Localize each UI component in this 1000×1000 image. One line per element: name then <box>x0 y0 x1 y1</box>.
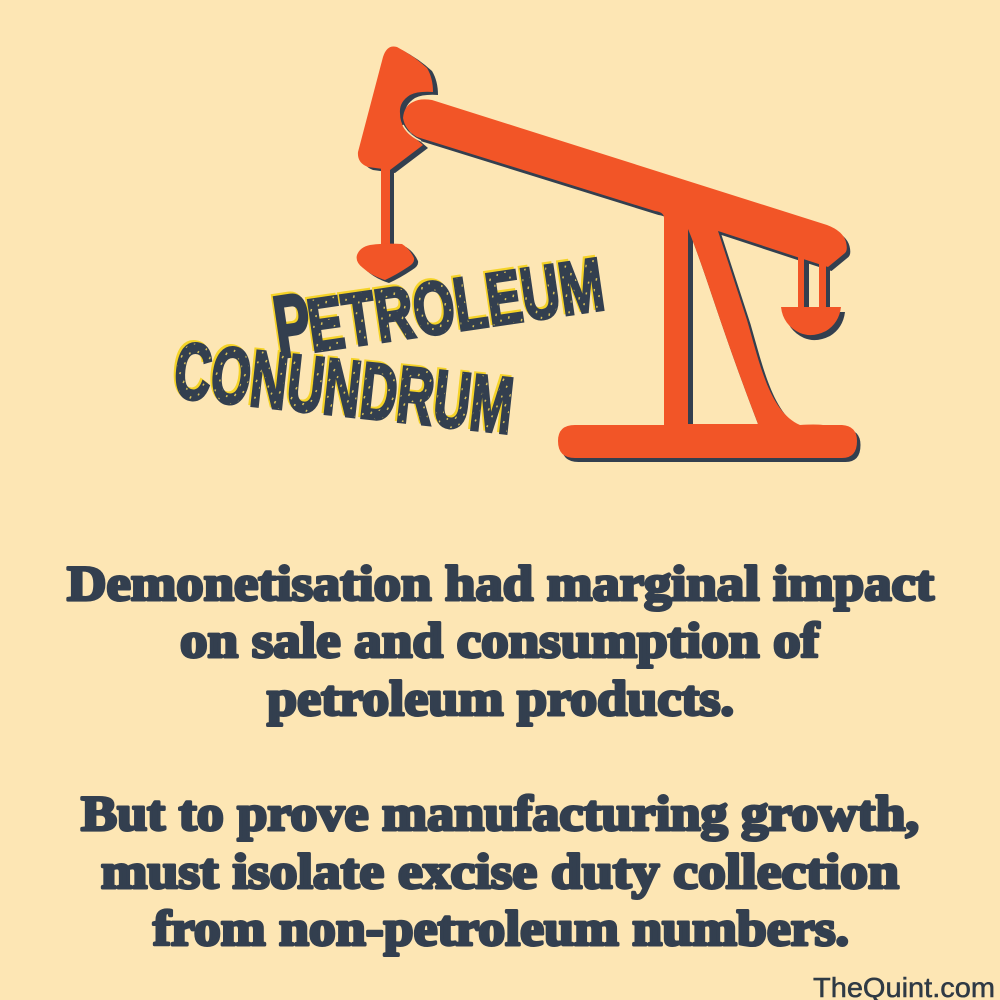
icon: oil pump jack <box>357 46 860 462</box>
heading dark letters <box>170 242 609 451</box>
heading yellow offset: P <box>265 272 315 375</box>
horse head <box>358 46 433 170</box>
text block: demonetisation impact: petroleum products. <box>267 670 734 726</box>
polished rod <box>381 160 390 250</box>
text block: demonetisation impact <box>67 555 934 726</box>
cut-out between post and strut <box>688 229 758 424</box>
text block: manufacturing growth: But to prove manufacturing growth, <box>81 785 919 841</box>
hanger bowl <box>781 307 841 335</box>
heading dark letters: ETROLEUM <box>302 242 609 368</box>
post shadow <box>688 229 693 424</box>
text block: manufacturing growth <box>81 785 919 956</box>
beam, post, strut and base <box>403 99 857 458</box>
heading distressed speckle <box>170 242 609 451</box>
heading distressed speckle: ETROLEUM <box>302 242 609 368</box>
hanger rods <box>798 256 826 308</box>
bob <box>357 244 414 280</box>
pump shadow <box>361 49 860 462</box>
heading distressed speckle: CONUNDRUM <box>170 325 518 451</box>
heading dark letters: P <box>267 274 317 377</box>
text block: demonetisation impact: Demonetisation had marginal impact <box>67 555 934 611</box>
heading yellow offset: CONUNDRUM <box>168 323 516 449</box>
text block: demonetisation impact: on sale and consumption of <box>180 612 820 668</box>
heading dark letters: CONUNDRUM <box>170 325 518 451</box>
heading yellow offset: ETROLEUM <box>300 240 607 366</box>
heading yellow offset <box>168 240 607 449</box>
text block: manufacturing growth: must isolate excise duty collection <box>101 843 899 899</box>
title: petroleum conundrum <box>168 240 609 451</box>
beam edge highlight <box>403 125 421 141</box>
text block: manufacturing growth: from non-petroleum numbers. <box>153 900 849 956</box>
